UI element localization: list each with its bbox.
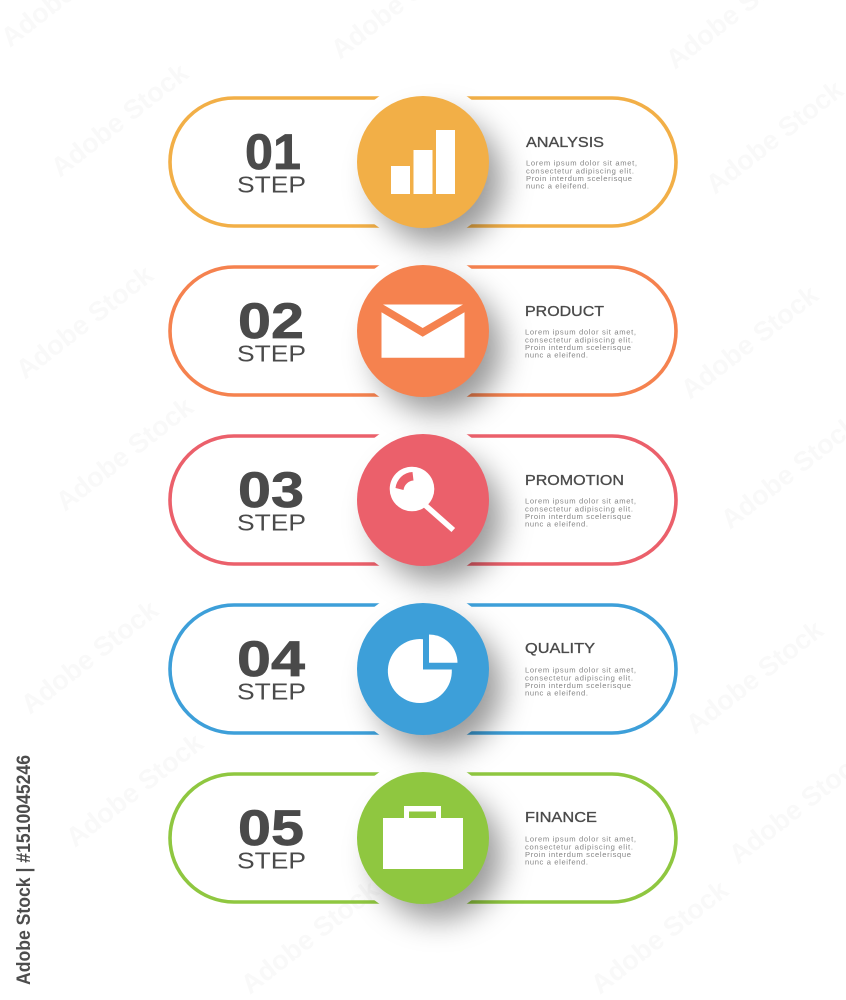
description: consectetur adipiscing elit. bbox=[525, 504, 633, 513]
description: Proin interdum scelerisque bbox=[525, 512, 631, 521]
watermark pattern: Adobe Stock bbox=[700, 74, 846, 200]
description: Proin interdum scelerisque bbox=[525, 681, 631, 690]
description: Proin interdum scelerisque bbox=[525, 850, 631, 859]
pill outline bbox=[170, 605, 676, 733]
circle bbox=[357, 265, 489, 397]
watermark pattern: Adobe Stock bbox=[45, 57, 195, 183]
icon: pie chart bbox=[388, 634, 458, 703]
description: nunc a eleifend. bbox=[525, 520, 588, 529]
pill outline bbox=[170, 267, 676, 395]
icon: briefcase bbox=[383, 806, 463, 869]
description: Lorem ipsum dolor sit amet, bbox=[525, 328, 636, 337]
description: Proin interdum scelerisque bbox=[526, 174, 632, 183]
pill outline bbox=[170, 774, 676, 902]
description: Lorem ipsum dolor sit amet, bbox=[526, 159, 637, 168]
description: Lorem ipsum dolor sit amet, bbox=[525, 497, 636, 506]
circle shadow bbox=[374, 623, 502, 751]
circle shadow bbox=[374, 116, 502, 244]
watermark pattern: Adobe Stock bbox=[50, 391, 200, 517]
description: nunc a eleifend. bbox=[525, 351, 588, 360]
heading: QUALITY bbox=[525, 641, 595, 657]
description: consectetur adipiscing elit. bbox=[526, 166, 634, 175]
circle shadow bbox=[374, 285, 502, 413]
step 04: quality bbox=[170, 603, 676, 751]
icon: envelope bbox=[382, 304, 464, 358]
pill outline bbox=[170, 98, 676, 226]
step label: STEP bbox=[237, 678, 306, 704]
watermark pattern: Adobe Stock bbox=[675, 279, 825, 405]
circle bbox=[357, 96, 489, 228]
watermark pattern: Adobe Stock bbox=[10, 259, 160, 385]
description: Proin interdum scelerisque bbox=[525, 343, 631, 352]
circle bbox=[357, 434, 489, 566]
stock credit: Adobe Stock | #1510045246 bbox=[14, 755, 35, 985]
step number: 02 bbox=[238, 293, 304, 349]
circle bbox=[357, 772, 489, 904]
icon: magnifying glass bbox=[390, 467, 453, 530]
description: consectetur adipiscing elit. bbox=[525, 673, 633, 682]
step number: 01 bbox=[245, 124, 301, 180]
heading: PRODUCT bbox=[525, 304, 604, 320]
step label: STEP bbox=[237, 510, 306, 536]
description: nunc a eleifend. bbox=[525, 858, 588, 867]
heading: FINANCE bbox=[525, 810, 597, 826]
heading: PROMOTION bbox=[525, 473, 624, 489]
watermark pattern: Adobe Stock bbox=[235, 874, 385, 1000]
step 02: product bbox=[170, 265, 676, 413]
icon: bar chart bbox=[391, 130, 455, 194]
watermark pattern: Adobe Stock bbox=[585, 874, 735, 1000]
heading: ANALYSIS bbox=[526, 135, 604, 151]
step 03: promotion bbox=[170, 434, 676, 582]
pill outline bbox=[170, 436, 676, 564]
circle bbox=[357, 603, 489, 735]
circle shadow bbox=[374, 454, 502, 582]
circle shadow bbox=[374, 792, 502, 920]
step label: STEP bbox=[237, 848, 306, 874]
description: consectetur adipiscing elit. bbox=[525, 842, 633, 851]
step number: 03 bbox=[238, 462, 304, 518]
step number: 05 bbox=[238, 800, 304, 856]
watermark pattern: Adobe Stock bbox=[60, 727, 210, 853]
watermark pattern: Adobe Stock bbox=[15, 594, 165, 720]
step label: STEP bbox=[237, 340, 306, 366]
step number: 04 bbox=[237, 631, 305, 687]
step 05: finance bbox=[170, 772, 676, 920]
description: Lorem ipsum dolor sit amet, bbox=[525, 666, 636, 675]
watermark pattern: Adobe Stock bbox=[680, 614, 830, 740]
step 01: analysis bbox=[170, 96, 676, 244]
description: Lorem ipsum dolor sit amet, bbox=[525, 835, 636, 844]
description: nunc a eleifend. bbox=[526, 182, 589, 191]
description: nunc a eleifend. bbox=[525, 689, 588, 698]
description: consectetur adipiscing elit. bbox=[525, 335, 633, 344]
step label: STEP bbox=[237, 172, 306, 198]
